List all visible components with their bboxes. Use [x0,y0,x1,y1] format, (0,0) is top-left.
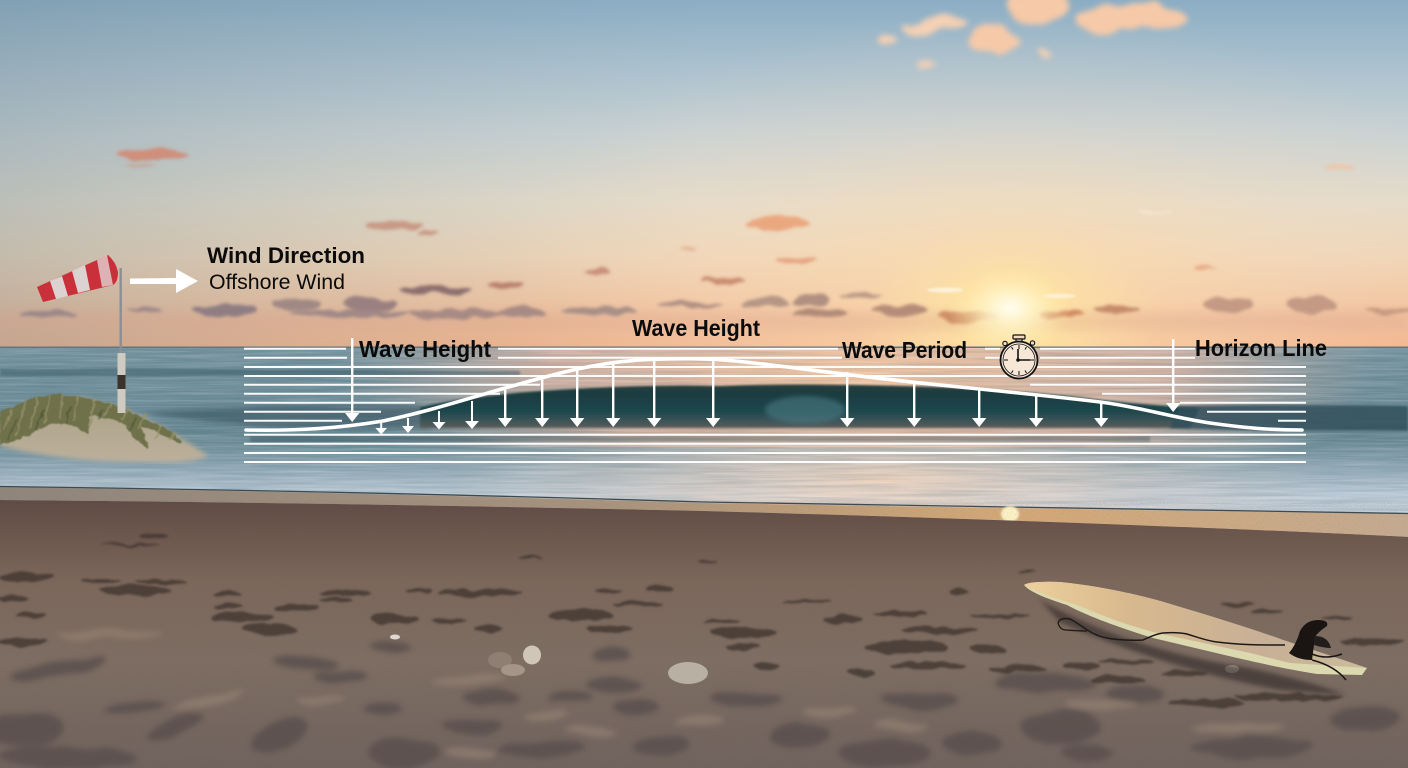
sand beach [0,500,1408,768]
horizon line label: Horizon Line [1195,335,1327,361]
icon: stopwatch [1000,335,1038,378]
wave period label: Wave Period [842,337,967,363]
breaking wave [0,369,1408,442]
mid-sky clouds [116,150,1358,288]
wave profile curve [246,359,1302,430]
wave height label top: Wave Height [632,315,760,341]
shoreline and wet sand [0,486,1408,537]
horizon cloud bank [0,286,1408,330]
arrow: horizon line [1166,339,1180,412]
icon: red and white sock [37,255,118,302]
upper clouds [872,0,1191,68]
icon: shells [390,634,1239,684]
background: sky [0,0,1408,348]
arrow: left wave height [345,338,359,422]
arrow: offshore wind [130,269,198,293]
foreground sand hollows [0,643,1399,768]
wave height label left: Wave Height [359,336,491,362]
dark footprints [0,534,1406,707]
wind direction label: Wind Direction [207,243,365,268]
wave grid lines [244,349,1306,462]
wind direction label: Offshore Wind [209,271,345,294]
sand highlights [55,631,1286,758]
icon: fin [1289,620,1346,680]
surfboard with fin and leash [1024,582,1367,695]
wind direction label [207,243,365,294]
wave height arrows under curve [375,359,1108,434]
sun [927,264,1076,352]
sand dune with grass [0,394,208,462]
windsock on pole [37,255,126,413]
sun reflection [1001,506,1019,522]
sea [0,346,1408,527]
